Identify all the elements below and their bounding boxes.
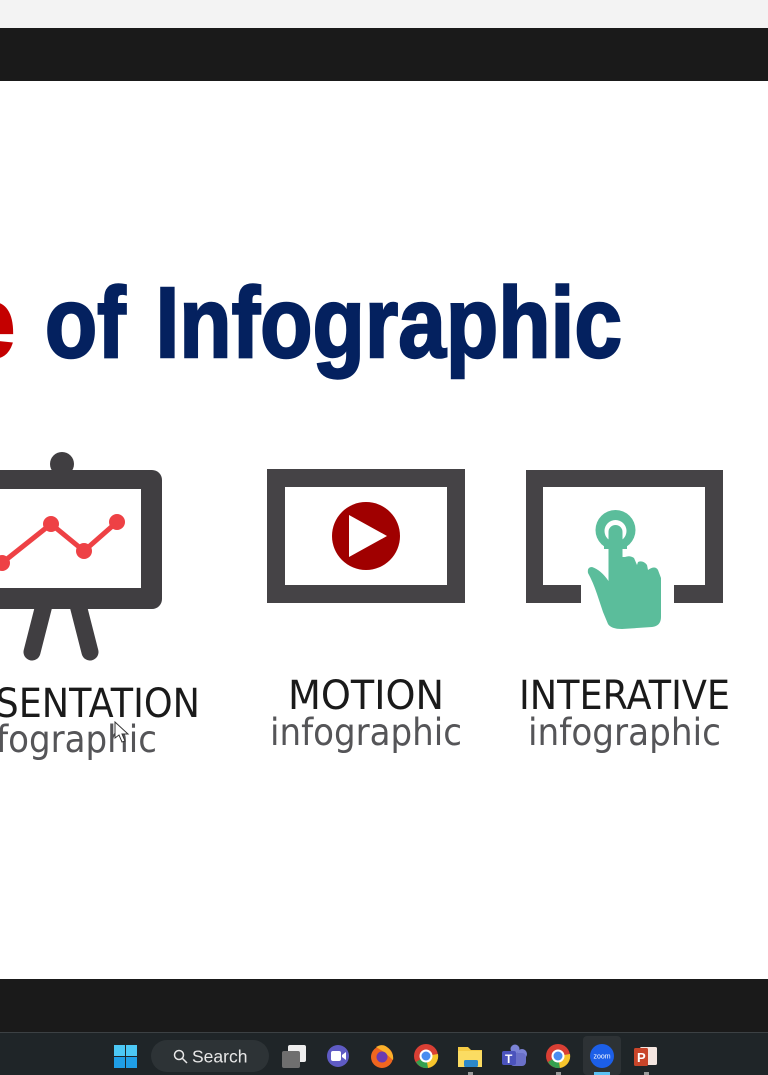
heading: interative: INTERATIVE: [519, 673, 730, 719]
panel: windows taskbar: [0, 1032, 768, 1075]
icon: chrome: [546, 1044, 570, 1068]
icon: zoom active: [583, 1036, 621, 1075]
icon: meet: [327, 1045, 349, 1067]
search box: [151, 1040, 269, 1072]
icon: chrome: [414, 1044, 438, 1068]
icon: powerpoint: P: [637, 1050, 646, 1065]
icon: teams: [502, 1044, 527, 1066]
icon: teams: T: [505, 1052, 513, 1066]
icon: presentation board with line chart: [0, 452, 162, 652]
heading: motion: MOTION: [288, 673, 444, 719]
search box: Search: [192, 1046, 247, 1066]
panel: motion infographic: [267, 469, 465, 754]
panel: interactive infographic: [519, 470, 730, 754]
icon: touch screen with pointing hand: [526, 470, 723, 629]
icon: task view: [282, 1045, 306, 1068]
icon: windows start: [114, 1045, 137, 1068]
icon: zoom active: zoom: [593, 1054, 611, 1060]
icon: firefox: [371, 1045, 393, 1068]
panel: presentation infographic: [0, 452, 200, 761]
text: infographic: infographic: [270, 711, 462, 754]
icon: video frame with play button: [267, 469, 465, 603]
icon: mouse cursor: [115, 722, 128, 742]
icon: powerpoint: [634, 1047, 657, 1066]
text: infographic: infographic: [528, 711, 721, 754]
icon: file explorer: [458, 1047, 482, 1067]
